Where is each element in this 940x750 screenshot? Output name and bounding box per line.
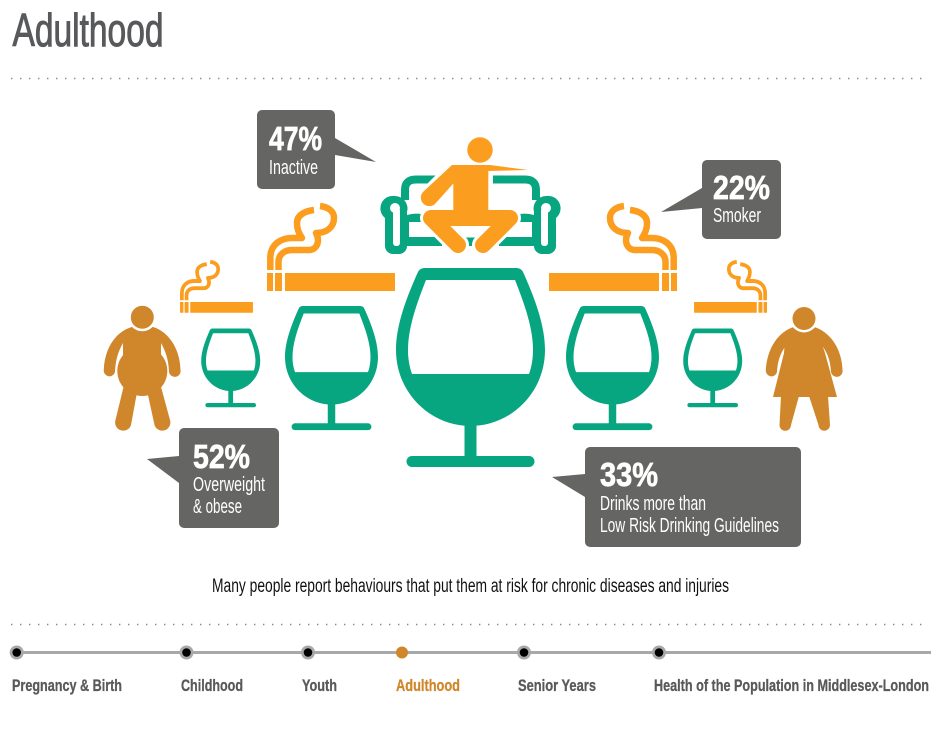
callout: 33% drinks more than guidelines	[552, 447, 801, 547]
icon: large wine glass	[396, 268, 545, 467]
icon: small left wine glass	[201, 328, 260, 407]
callout: 47% inactive	[257, 110, 376, 189]
timeline labels: Senior Years	[518, 676, 596, 695]
timeline nodes	[10, 646, 666, 660]
icon: sitting person	[421, 137, 528, 245]
callout: 33% drinks more than guidelines: Low Risk Drinking Guidelines	[600, 515, 779, 537]
icon: large right cigarette	[549, 206, 677, 291]
callout: 47% inactive: Inactive	[269, 157, 318, 179]
icon: medium right wine glass	[566, 306, 659, 430]
timeline labels: Childhood	[181, 676, 243, 695]
callout: 52% overweight and obese: 52%	[193, 438, 250, 475]
callout: 47% inactive: 47%	[269, 120, 322, 157]
icon: small left cigarette	[180, 262, 253, 313]
icon: small right cigarette	[694, 262, 767, 313]
callout: 33% drinks more than guidelines: Drinks more than	[600, 493, 706, 515]
icon: large left cigarette	[267, 206, 395, 291]
callout: 52% overweight and obese: Overweight	[193, 474, 265, 496]
timeline labels	[12, 676, 929, 695]
title: Adulthood	[12, 4, 164, 56]
callout: 22% smoker	[661, 160, 781, 239]
timeline labels: Youth	[302, 676, 337, 695]
callout: 52% overweight and obese	[147, 428, 279, 528]
callout: 22% smoker: 22%	[713, 169, 770, 206]
timeline line	[16, 651, 931, 654]
timeline labels: Adulthood	[396, 676, 460, 695]
callout: 22% smoker: Smoker	[713, 205, 761, 227]
timeline labels: Pregnancy & Birth	[12, 676, 122, 695]
icon: small right wine glass	[683, 328, 742, 407]
icon: couch	[380, 180, 561, 254]
icon: couch and sitting person	[380, 137, 561, 254]
callout: 52% overweight and obese: & obese	[193, 496, 242, 518]
callout: 33% drinks more than guidelines: 33%	[600, 456, 658, 493]
icon: overweight man	[104, 303, 181, 431]
icon: medium left wine glass	[285, 306, 378, 430]
caption: Many people report behaviours that put them at risk for chronic diseases and injuries	[212, 576, 729, 597]
icon: overweight woman	[766, 304, 843, 431]
timeline navigation	[10, 646, 931, 695]
